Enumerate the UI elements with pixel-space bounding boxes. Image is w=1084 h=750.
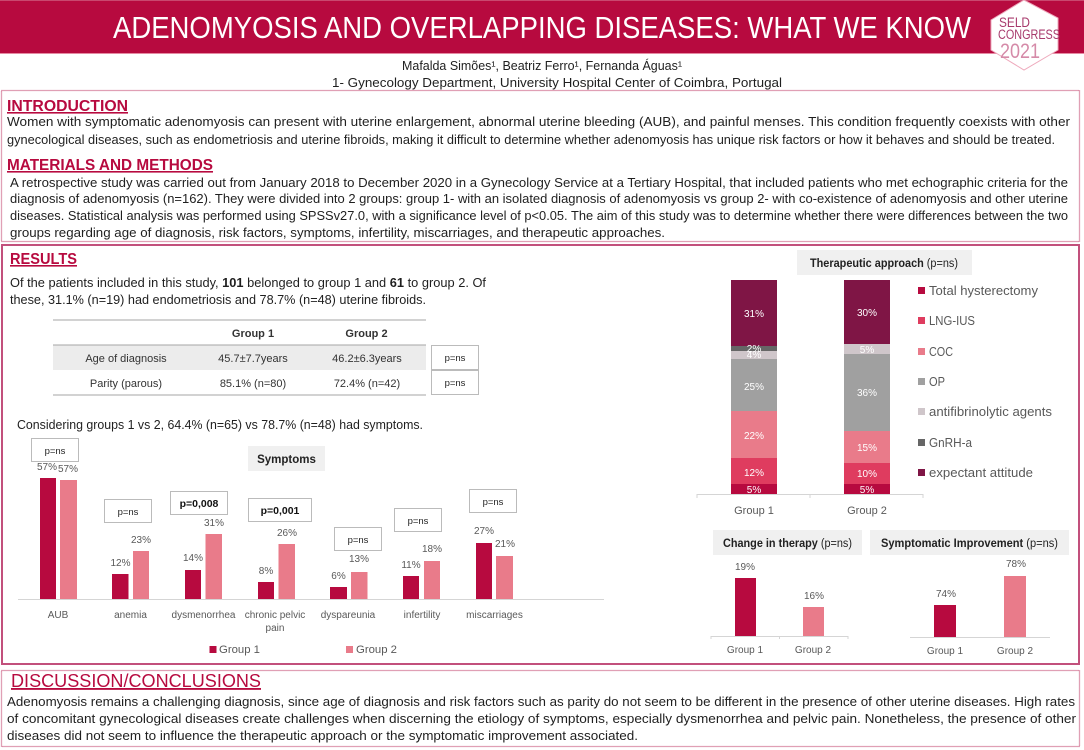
- bar chart: symptoms: pain: [266, 623, 284, 634]
- chart title: therapeutic approach: [797, 250, 972, 275]
- stacked bar chart: therapeutic approach: 22%: [744, 431, 764, 442]
- bar chart: symptomatic improvement: Group 1: [927, 646, 964, 657]
- table: group characteristics: Parity (parous): [90, 378, 162, 390]
- bar chart: symptoms: AUB: [48, 610, 69, 621]
- stacked bar chart: therapeutic approach: 2%: [747, 344, 761, 355]
- icon: SELD congress 2021 logo: [991, 0, 1060, 70]
- chart title: symptoms: [248, 446, 325, 471]
- stacked bar chart: therapeutic approach: [697, 250, 1052, 517]
- stacked bar chart: therapeutic approach: Group 2: [847, 505, 887, 517]
- table: group characteristics: Group 2: [345, 328, 388, 340]
- text: symptoms sentence: Considering groups 1 vs 2, 64.4% (n=65) vs 78.7% (n=48) had symptoms.: [17, 417, 423, 432]
- stacked bar chart: therapeutic approach: Group 1: [734, 505, 774, 517]
- callouts: symptom p-values: p=ns: [408, 516, 429, 527]
- chart title: symptomatic improvement: Symptomatic Improvement (p=ns): [881, 538, 1058, 550]
- legend: therapies: Total hysterectomy: [929, 284, 1039, 298]
- header banner: [0, 0, 1084, 54]
- bar chart: symptoms: 57%: [37, 462, 57, 473]
- bar chart: symptoms: infertility: [404, 610, 440, 621]
- panel: results: [2, 245, 1079, 664]
- icon: SELD congress 2021 logo: 2021: [1000, 40, 1040, 63]
- bar chart: symptoms: anemia: [114, 610, 147, 621]
- bar chart: symptoms: 11%: [401, 560, 421, 571]
- callouts: symptom p-values: p=ns: [45, 446, 66, 457]
- table: group characteristics: Age of diagnosis: [85, 353, 167, 365]
- bar chart: symptoms: 18%: [422, 544, 442, 555]
- table: group characteristics: p=ns: [445, 353, 466, 364]
- bar chart: change in therapy: [711, 530, 862, 656]
- text: methods: diagnosis of adenomyosis (n=162). They were divided into 2 groups: group 1- with an isolated diagnosis of adenomyosis vs group 2- with co-existence of adenomyosis and other uterine: [10, 191, 1068, 206]
- icon: SELD congress 2021 logo: SELD: [999, 15, 1030, 30]
- chart title: symptoms: Symptoms: [257, 454, 316, 466]
- authors: Mafalda Simões¹, Beatriz Ferro¹, Fernanda Águas¹: [402, 58, 682, 73]
- text: methods: diseases. Statistical analysis was performed using SPSSv27.0, with a significance level of p<0.05. The aim of this study was to determine whether there were differences between the two: [10, 208, 1068, 223]
- chart title: symptomatic improvement: [870, 530, 1069, 555]
- callouts: symptom p-values: p=0,001: [261, 505, 300, 517]
- heading: discussion and conclusions: DISCUSSION/CONCLUSIONS: [11, 670, 261, 691]
- text: discussion: Adenomyosis remains a challenging diagnosis, since age of diagnosis and risk factors such as parity do not seem to be different in the presence of other uterine diseases. High rates: [7, 694, 1076, 709]
- legend: therapies: antifibrinolytic agents: [929, 405, 1052, 419]
- heading: materials and methods: MATERIALS AND METHODS: [7, 157, 213, 174]
- text: results intro: [10, 275, 486, 307]
- callouts: symptom p-values: p=ns: [118, 507, 139, 518]
- stacked bar chart: therapeutic approach: 5%: [860, 345, 874, 356]
- bar chart: change in therapy: 19%: [735, 562, 755, 573]
- affiliation: 1- Gynecology Department, University Hospital Center of Coimbra, Portugal: [332, 76, 782, 90]
- heading: results: RESULTS: [10, 251, 77, 268]
- bar chart: symptoms: 57%: [58, 464, 78, 475]
- stacked bar chart: therapeutic approach: 31%: [744, 309, 764, 320]
- table: group characteristics: p=ns: [445, 378, 466, 389]
- legend: therapies: OP: [929, 375, 945, 389]
- bar chart: symptomatic improvement: 74%: [936, 589, 956, 600]
- text: introduction: [7, 114, 1071, 147]
- stacked bar chart: therapeutic approach: 5%: [747, 485, 761, 496]
- text: results intro: Of the patients included in this study, 101 belonged to group 1 and 61 to group 2. Of: [10, 275, 486, 290]
- table: group characteristics: 72.4% (n=42): [334, 378, 400, 390]
- legend: groups: [210, 644, 397, 656]
- icon: SELD congress 2021 logo: CONGRESS: [998, 27, 1060, 42]
- heading: introduction: INTRODUCTION: [7, 98, 128, 115]
- bar chart: symptoms: 12%: [110, 558, 131, 569]
- bar chart: symptoms: 6%: [331, 571, 346, 582]
- table: group characteristics: [53, 320, 478, 395]
- bar chart: symptoms: 23%: [131, 535, 151, 546]
- text: methods: groups regarding age of diagnosis, risk factors, symptoms, infertility, miscarriages, and therapeutic approaches.: [10, 225, 665, 240]
- bar chart: change in therapy: 16%: [804, 591, 824, 602]
- legend: groups: Group 2: [356, 644, 397, 656]
- table: group characteristics: 45.7±7.7years: [218, 353, 288, 365]
- text: discussion: of concomitant gynecological diseases create challenges when discerning the etiology of symptoms, especially dysmenorrhea and pelvic pain. Nonetheless, the presence of other: [7, 711, 1077, 726]
- stacked bar chart: therapeutic approach: 30%: [857, 308, 877, 319]
- table: group characteristics: Group 1: [232, 328, 274, 340]
- callouts: symptom p-values: p=ns: [348, 535, 369, 546]
- legend: therapies: LNG-IUS: [929, 314, 975, 328]
- bar chart: symptoms: [18, 446, 604, 656]
- chart title: therapeutic approach: Therapeutic approach (p=ns): [810, 258, 958, 270]
- bar chart: symptoms: 27%: [474, 526, 494, 537]
- text: discussion: diseases did not seem to influence the therapeutic approach or the symptomatic improvement associated.: [7, 728, 638, 743]
- chart title: change in therapy: [713, 530, 862, 555]
- stacked bar chart: therapeutic approach: 25%: [744, 382, 764, 393]
- callouts: symptom p-values: p=0,008: [180, 498, 219, 510]
- bar chart: symptoms: 26%: [277, 528, 297, 539]
- text: introduction: Women with symptomatic adenomyosis can present with uterine enlargement, abnormal uterine bleeding (AUB), and painful menses. This condition frequently coexists with other: [7, 114, 1071, 129]
- stacked bar chart: therapeutic approach: 15%: [857, 443, 877, 454]
- bar chart: symptoms: 31%: [204, 518, 224, 529]
- stacked bar chart: therapeutic approach: 12%: [744, 468, 764, 479]
- text: results intro: these, 31.1% (n=19) had endometriosis and 78.7% (n=48) uterine fibroids.: [10, 292, 426, 307]
- text: methods: A retrospective study was carried out from January 2018 to December 2020 in a Gynecology Service at a Tertiary Hospital, that included patients who met echographic criteria for the: [10, 175, 1068, 190]
- text: discussion: [7, 694, 1077, 743]
- legend: therapies: GnRH-a: [929, 436, 972, 450]
- table: group characteristics: 85.1% (n=80): [220, 378, 286, 390]
- stacked bar chart: therapeutic approach: 5%: [860, 485, 874, 496]
- legend: groups: Group 1: [219, 644, 260, 656]
- stacked bar chart: therapeutic approach: 4%: [747, 350, 761, 361]
- legend: therapies: expectant attitude: [929, 466, 1033, 480]
- bar chart: symptoms: chronic pelvic: [245, 610, 305, 621]
- bar chart: symptoms: 13%: [349, 554, 369, 565]
- legend: therapies: [918, 284, 1052, 480]
- callouts: symptom p-values: [32, 438, 516, 550]
- callouts: symptom p-values: p=ns: [483, 497, 504, 508]
- bar chart: symptoms: dysmenorrhea: [172, 610, 236, 621]
- stacked bar chart: therapeutic approach: 10%: [857, 469, 877, 480]
- panel: discussion and conclusions: [2, 670, 1080, 746]
- title: ADENOMYOSIS AND OVERLAPPING DISEASES: WHAT WE KNOW: [113, 11, 971, 45]
- bar chart: symptoms: 21%: [495, 539, 515, 550]
- bar chart: symptomatic improvement: 78%: [1006, 559, 1026, 570]
- bar chart: change in therapy: Group 2: [795, 645, 832, 656]
- bar chart: change in therapy: Group 1: [727, 645, 764, 656]
- bar chart: symptoms: dyspareunia: [321, 610, 376, 621]
- chart title: change in therapy: Change in therapy (p=ns): [723, 538, 852, 550]
- panel: introduction and methods: [2, 90, 1080, 242]
- bar chart: symptoms: 14%: [183, 553, 203, 564]
- bar chart: symptomatic improvement: [870, 530, 1069, 657]
- bar chart: symptoms: 8%: [259, 566, 273, 577]
- bar chart: symptomatic improvement: Group 2: [997, 646, 1034, 657]
- legend: therapies: COC: [929, 345, 953, 359]
- text: introduction: gynecological diseases, such as endometriosis and uterine fibroids, making it difficult to determine whether adenomyosis has unique risk factors or how it behaves and should be treated.: [7, 132, 1055, 147]
- text: methods: [10, 175, 1068, 240]
- table: group characteristics: 46.2±6.3years: [332, 353, 402, 365]
- bar chart: symptoms: miscarriages: [466, 610, 523, 621]
- stacked bar chart: therapeutic approach: 36%: [857, 388, 877, 399]
